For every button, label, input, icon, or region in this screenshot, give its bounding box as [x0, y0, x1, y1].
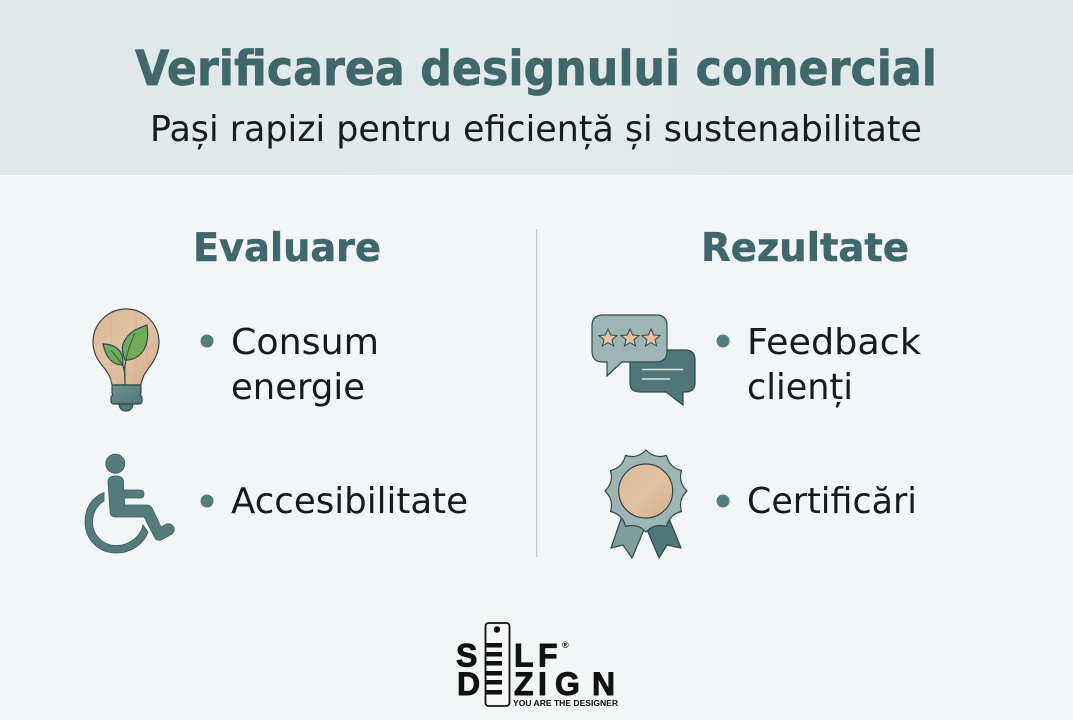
stars [599, 329, 660, 346]
logo wordmark: D [457, 666, 480, 702]
bullet: consum energie [200, 322, 379, 408]
bullet: feedback clienti [716, 322, 921, 408]
bullet: feedback clienti: clienți [747, 367, 853, 408]
icon: wheelchair accessibility [85, 454, 174, 553]
divider [536, 229, 537, 557]
heading: rezultate: Rezultate [701, 226, 909, 271]
icon: light bulb with leaves [93, 309, 159, 411]
title: Verificarea designului comercial [135, 41, 937, 97]
bullet: consum energie: energie [231, 367, 365, 408]
logo tagline: YOU ARE THE DESIGNER [513, 699, 618, 708]
bullet: certificari: Certificări [747, 481, 917, 522]
icon: award rosette [605, 450, 687, 558]
logo wordmark [456, 638, 615, 702]
logo: self dezign [456, 623, 618, 708]
bullet: feedback clienti: Feedback [747, 322, 921, 363]
panel: rezultate [592, 226, 921, 558]
subtitle: Pași rapizi pentru eficiență și sustenabilitate [150, 109, 922, 150]
logo ruler [486, 623, 510, 706]
header band [0, 0, 1073, 175]
logo wordmark: ZIGN [514, 666, 615, 702]
registered mark: ® [562, 640, 569, 650]
heading: evaluare: Evaluare [193, 226, 381, 271]
bullet: consum energie: Consum [231, 322, 379, 363]
logo wordmark: S [456, 638, 477, 674]
logo wordmark: LF [514, 638, 558, 674]
bullet: accesibilitate: Accesibilitate [231, 481, 468, 522]
panel: evaluare [85, 226, 468, 553]
icon: speech bubbles with stars [592, 315, 695, 405]
